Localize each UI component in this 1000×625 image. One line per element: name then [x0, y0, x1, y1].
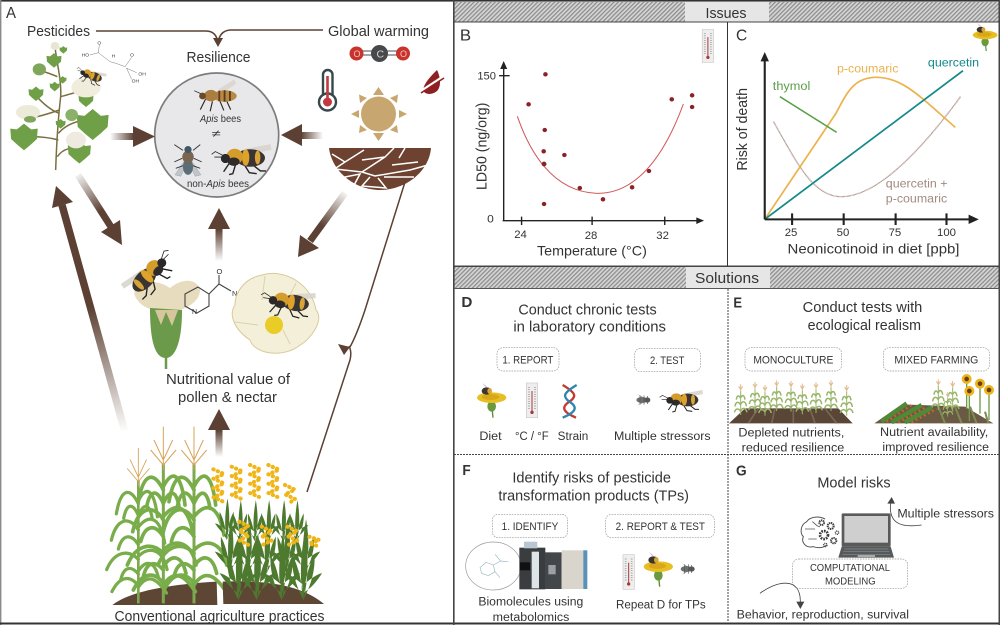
- header bar: Solutions: [454, 267, 1000, 288]
- icon labels: Diet: [479, 429, 502, 443]
- header label: Solutions: [695, 270, 759, 287]
- series labels: quercetin: [928, 56, 979, 70]
- arrow: agriculture to nutrition: [208, 409, 230, 457]
- captions: improved resilience: [882, 440, 989, 454]
- label: Apis bees: Apis bees: [199, 113, 241, 125]
- icon: thermometer: [526, 383, 538, 418]
- arrow: pesticides and warming merge into resilience: [96, 30, 323, 47]
- series labels: [773, 56, 979, 206]
- label: Multiple stressors: Multiple stressors: [897, 506, 994, 520]
- dotted curve: quercetin + p-coumaric: [774, 97, 961, 197]
- icon labels: °C / °F: [515, 429, 549, 443]
- heading: Model risks: [817, 475, 891, 491]
- nicotinamide molecule: O: [216, 267, 222, 276]
- glyphosate molecule: O: [97, 40, 101, 46]
- label: Conventional agriculture practices: Conventional agriculture practices: [114, 609, 324, 625]
- icon: brain with gears: [801, 517, 839, 548]
- icon: carbon dioxide molecule: [350, 45, 410, 62]
- icon: bumble bee: [212, 144, 271, 175]
- heading: Resilience: Resilience: [186, 49, 250, 66]
- caption: metabolomics: [493, 610, 569, 624]
- panel letter E: E: [733, 296, 742, 312]
- axis tick labels: 24: [514, 229, 527, 241]
- illustration: monoculture field: [729, 380, 853, 423]
- nicotinamide molecule: NH₂: [232, 289, 246, 298]
- icon: crossed water drop: [421, 70, 444, 94]
- tag: 2. TEST: 2. TEST: [650, 355, 685, 367]
- tag: MIXED FARMING: [883, 348, 989, 371]
- axis tick labels: 25: [785, 227, 797, 239]
- icon: thermometer: [623, 555, 634, 589]
- icon: mason bee: [174, 145, 202, 176]
- tag: 1. REPORT: 1. REPORT: [502, 354, 554, 366]
- glyphosate molecule: O: [130, 53, 134, 59]
- label: Pesticides: Pesticides: [27, 23, 90, 40]
- tag: computational modeling: [793, 559, 908, 588]
- icon: small bee: [636, 394, 650, 405]
- panel A: pathways of stress on bee resilience: [6, 5, 444, 625]
- tag: 1. REPORT: [497, 348, 559, 371]
- icon: carbon dioxide molecule: C: [376, 48, 384, 60]
- series labels: p-coumaric: [837, 62, 898, 76]
- illustration: corn and rapeseed crops: [107, 427, 324, 605]
- axis tick labels: [785, 227, 956, 239]
- line: thymol: [780, 97, 837, 132]
- glyphosate molecule: OH: [132, 79, 140, 85]
- heading: [803, 300, 922, 334]
- panel letter C: C: [736, 28, 747, 45]
- bees circle: [155, 73, 279, 197]
- arrow: global warming to resilience circle: [281, 124, 323, 146]
- tag: 1. IDENTIFY: [492, 514, 568, 538]
- icon labels: Strain: [558, 429, 588, 443]
- label: Global warming: Global warming: [328, 23, 429, 40]
- x axis title: Neonicotinoid in diet [ppb]: [788, 241, 959, 256]
- captions: Depleted nutrients,: [738, 426, 844, 440]
- panel letter A: A: [6, 5, 16, 22]
- label: Behavior, reproduction, survival: Behavior, reproduction, survival: [737, 607, 909, 621]
- caption: Repeat D for TPs: [616, 597, 706, 611]
- axis tick labels: [477, 71, 669, 242]
- label: non-Apis bees: non-Apis bees: [187, 178, 249, 190]
- cotton plant with bee: [10, 40, 146, 170]
- panel letter D: D: [461, 295, 472, 311]
- chart axes: [499, 61, 704, 225]
- corn field: [107, 427, 227, 605]
- icon: bee on flower: [973, 23, 997, 51]
- icon: thermometer: [702, 30, 714, 62]
- series labels: quercetin +: [886, 177, 948, 190]
- heading: in laboratory conditions: [513, 320, 666, 336]
- data points: [526, 72, 694, 206]
- icon: honey bee: [194, 79, 237, 111]
- arrow: agriculture to pesticides: [52, 186, 125, 432]
- glyphosate molecule: [82, 40, 146, 85]
- label: not equal: ≠: [212, 129, 221, 140]
- axis tick labels: 150: [477, 71, 496, 82]
- heading: [498, 470, 689, 504]
- tag: 2. REPORT & TEST: 2. REPORT & TEST: [616, 521, 705, 533]
- series labels: thymol: [773, 79, 810, 93]
- panel letter B: B: [460, 28, 471, 45]
- chart axes: [761, 52, 979, 225]
- captions: reduced resilience: [742, 441, 844, 455]
- arrow: to behavior, reproduction, survival: [760, 583, 804, 609]
- captions: Nutrient availability,: [880, 425, 988, 439]
- heading: ecological realism: [808, 318, 921, 334]
- tag: computational modeling: MODELING: [825, 576, 876, 587]
- panel letter G: G: [736, 464, 747, 480]
- panel B: LD50 vs temperature chart: [460, 28, 714, 258]
- axis tick labels: 50: [837, 227, 849, 239]
- icon: sun: [351, 87, 407, 141]
- open cream flower with bumble bee: [232, 273, 319, 353]
- tag: 2. REPORT & TEST: [606, 514, 714, 538]
- panel D: chronic tests: [461, 295, 711, 443]
- heading: Conduct tests with: [803, 300, 922, 316]
- icon labels: [479, 429, 711, 443]
- axis tick labels: 28: [585, 230, 597, 242]
- heading: transformation products (TPs): [498, 488, 689, 504]
- x axis title: Temperature (°C): [537, 243, 647, 258]
- panel C: risk of death vs neonicotinoid chart: [734, 23, 997, 256]
- illustration: mixed farming field: [874, 374, 994, 423]
- icon labels: Multiple stressors: [614, 429, 711, 443]
- panel E: ecological realism: [729, 296, 994, 455]
- series labels: p-coumaric: [886, 192, 947, 206]
- label: Nutritional value of pollen & nectar: [166, 371, 291, 406]
- nicotinamide molecule: N: [192, 309, 197, 316]
- icon: bee on flower: [477, 383, 506, 418]
- arrow: pesticides to flowers: [78, 175, 122, 245]
- icon: carbon dioxide molecule: O: [400, 49, 407, 59]
- heading: Identify risks of pesticide: [512, 470, 671, 486]
- label: Nutritional value of pollen & nectar: Nutritional value of: [166, 371, 291, 388]
- header label: Issues: [706, 5, 746, 22]
- icon: molecule in circle: [466, 542, 521, 590]
- arrow: nutrition to resilience: [208, 208, 230, 261]
- tubular flower with bumble bee: [120, 243, 200, 369]
- panel G: model risks: [736, 464, 994, 621]
- icon: DNA strand: [563, 385, 577, 418]
- icon: thermometer: [319, 70, 336, 110]
- line: p-coumaric: [765, 77, 955, 219]
- heading: Conduct chronic tests: [518, 302, 657, 318]
- panel letter F: F: [462, 463, 471, 479]
- tag: MONOCULTURE: MONOCULTURE: [753, 354, 833, 366]
- rapeseed field: [213, 465, 324, 604]
- label: Nutritional value of pollen & nectar: pollen & nectar: [178, 389, 277, 406]
- arrow: to multiple stressors: [887, 497, 922, 526]
- axis tick labels: 32: [656, 230, 669, 242]
- icon: bumble bee: [660, 390, 703, 412]
- icon: laptop: [838, 513, 894, 558]
- axis tick labels: 100: [937, 227, 956, 239]
- icon: small bee: [681, 563, 695, 574]
- captions: [738, 425, 989, 455]
- arrow: pesticides to resilience circle: [110, 126, 155, 147]
- tag: MIXED FARMING: MIXED FARMING: [894, 354, 978, 366]
- axis tick labels: 0: [487, 214, 494, 225]
- caption: Biomolecules using: [478, 595, 583, 609]
- glyphosate molecule: H: [112, 53, 116, 59]
- tag: computational modeling: COMPUTATIONAL: [810, 563, 890, 574]
- glyphosate molecule: OH: [138, 71, 146, 77]
- line: quercetin: [765, 71, 963, 219]
- arrow: agriculture to soil and warming: [307, 182, 405, 492]
- y axis title: LD50 (ng/org): [473, 103, 490, 190]
- y axis title: Risk of death: [734, 88, 750, 171]
- header bar: Issues: [454, 2, 1000, 22]
- tag: MONOCULTURE: [745, 348, 842, 371]
- icon: cracked dry soil: [329, 148, 431, 190]
- icon: carbon dioxide molecule: O: [354, 49, 361, 59]
- axis tick labels: 75: [889, 227, 901, 239]
- fitted curve: [517, 104, 683, 193]
- nicotinamide molecule: [185, 267, 246, 316]
- heading: [513, 302, 666, 336]
- icon: mass spectrometer: [519, 542, 587, 589]
- caption: [478, 595, 583, 624]
- arrow: global warming to flowers: [298, 193, 345, 257]
- tag: 1. IDENTIFY: 1. IDENTIFY: [502, 521, 558, 533]
- panel F: pesticide transformation products: [462, 463, 714, 624]
- tag: 2. TEST: [635, 348, 700, 372]
- icon: bee on flower: [644, 552, 673, 587]
- glyphosate molecule: HO: [82, 53, 89, 59]
